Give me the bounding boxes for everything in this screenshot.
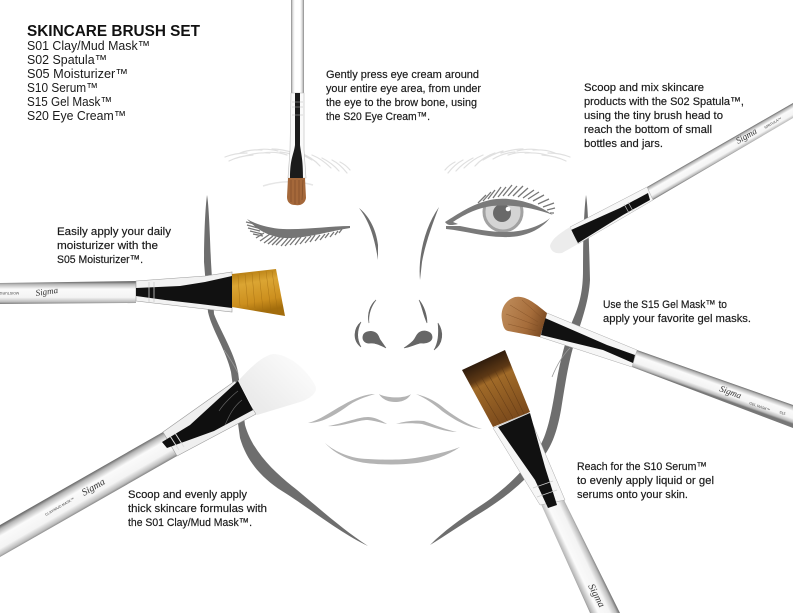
callout: S20 Eye Cream: your entire eye area, from under — [326, 83, 481, 95]
heading: brush set: SKINCARE BRUSH SET — [27, 23, 201, 40]
brush: S15 Gel Mask — [502, 297, 793, 428]
callout: S15 Gel Mask: Use the S15 Gel Mask™ to — [603, 299, 727, 311]
callout: S05 Moisturizer — [57, 226, 171, 266]
brush list — [27, 38, 150, 123]
callout: S01 Clay/Mud Mask: Scoop and evenly apply — [128, 489, 247, 501]
callout: S01 Clay/Mud Mask: thick skincare formulas with — [128, 503, 267, 515]
bristles — [287, 178, 306, 205]
brush: S02 Spatula: SPATULA™ — [764, 117, 782, 130]
closed eye with lashes — [246, 219, 350, 246]
brush: S20 Eye Cream — [287, 0, 306, 205]
callout: S15 Gel Mask: apply your favorite gel masks. — [603, 313, 751, 325]
iris — [482, 206, 524, 232]
handle marks: Sigma — [718, 383, 743, 401]
eyelashes — [478, 185, 555, 213]
handle — [632, 350, 793, 428]
face illustration — [204, 149, 590, 546]
handle — [0, 432, 177, 557]
handle — [647, 103, 793, 200]
brush: S15 Gel Mask: GEL MASK™ — [749, 401, 771, 412]
ferrule black core — [136, 276, 232, 308]
ferrule — [288, 93, 306, 178]
callout: S10 Serum: to evenly apply liquid or gel — [577, 475, 714, 487]
ferrule — [540, 313, 637, 367]
brush list: S01 Clay/Mud Mask™ — [27, 38, 150, 53]
nose bridge left — [359, 208, 378, 260]
handle marks: Sigma — [734, 126, 759, 146]
brush list: S20 Eye Cream™ — [27, 108, 126, 123]
callout: S05 Moisturizer: Easily apply your daily — [57, 226, 171, 238]
ferrule black core — [571, 193, 650, 243]
brush list: S10 Serum™ — [27, 80, 98, 95]
brush list: S02 Spatula™ — [27, 52, 107, 67]
open eye — [445, 185, 555, 237]
pupil — [493, 204, 511, 222]
brush list: S15 Gel Mask™ — [27, 94, 112, 109]
handle marks: Sigma — [35, 285, 59, 298]
callout: S20 Eye Cream: the eye to the brow bone, using — [326, 97, 477, 109]
handle marks: Sigma — [80, 477, 107, 499]
brush: S02 Spatula — [550, 103, 793, 253]
callout: S20 Eye Cream: the S20 Eye Cream™. — [326, 111, 430, 123]
silicone tip — [550, 227, 578, 253]
face outline right — [430, 195, 590, 545]
lips — [308, 394, 482, 464]
brow crease — [263, 182, 313, 186]
callout: S05 Moisturizer: S05 Moisturizer™. — [57, 254, 143, 266]
nose bridge right — [420, 207, 439, 280]
callout: S02 Spatula: using the tiny brush head to — [584, 110, 723, 122]
callout: S02 Spatula: Scoop and mix skincare — [584, 82, 704, 94]
brush: S05 Moisturizer — [0, 269, 285, 316]
callout: S10 Serum: Reach for the S10 Serum™ — [577, 461, 707, 473]
eyebrow right — [445, 149, 570, 173]
callout: S01 Clay/Mud Mask — [128, 489, 267, 529]
eyebrow left — [225, 149, 350, 173]
ferrule — [163, 381, 256, 456]
ferrule — [493, 413, 565, 505]
callout: S02 Spatula: bottles and jars. — [584, 138, 663, 150]
eyelids — [445, 199, 553, 225]
handle marks: Sigma — [585, 582, 607, 609]
brush list: S05 Moisturizer™ — [27, 66, 128, 81]
brush: S10 Serum — [462, 350, 620, 613]
silicone spatula head — [238, 354, 316, 415]
handle — [0, 281, 136, 304]
bristles — [232, 269, 285, 316]
ferrule black core — [541, 318, 635, 363]
callout: S10 Serum: serums onto your skin. — [577, 489, 688, 501]
face outline left — [204, 195, 368, 546]
callout: S02 Spatula: reach the bottom of small — [584, 124, 712, 136]
callout: S10 Serum — [577, 461, 714, 501]
ferrule — [570, 187, 653, 244]
callout: S20 Eye Cream — [326, 69, 481, 123]
callout: S01 Clay/Mud Mask: the S01 Clay/Mud Mask™. — [128, 517, 252, 529]
ferrule black core — [162, 381, 253, 448]
callout: S02 Spatula: products with the S02 Spatula™, — [584, 96, 744, 108]
ferrule — [136, 272, 232, 312]
bristles — [462, 350, 530, 427]
nose — [355, 300, 442, 350]
bristles — [502, 297, 547, 337]
callout: S20 Eye Cream: Gently press eye cream around — [326, 69, 479, 81]
callout: S15 Gel Mask — [603, 299, 751, 325]
ferrule black core — [498, 413, 557, 508]
brush: S15 Gel Mask: S15 — [779, 410, 786, 416]
callout: S02 Spatula — [584, 82, 744, 150]
callout: S05 Moisturizer: moisturizer with the — [57, 240, 158, 252]
handle — [540, 498, 620, 613]
handle — [291, 0, 304, 93]
brush: S01 Clay/Mud Mask: CLAY/MUD MASK™ — [44, 497, 75, 517]
brush: S01 Clay/Mud Mask — [0, 354, 316, 557]
ferrule black core — [290, 93, 303, 178]
